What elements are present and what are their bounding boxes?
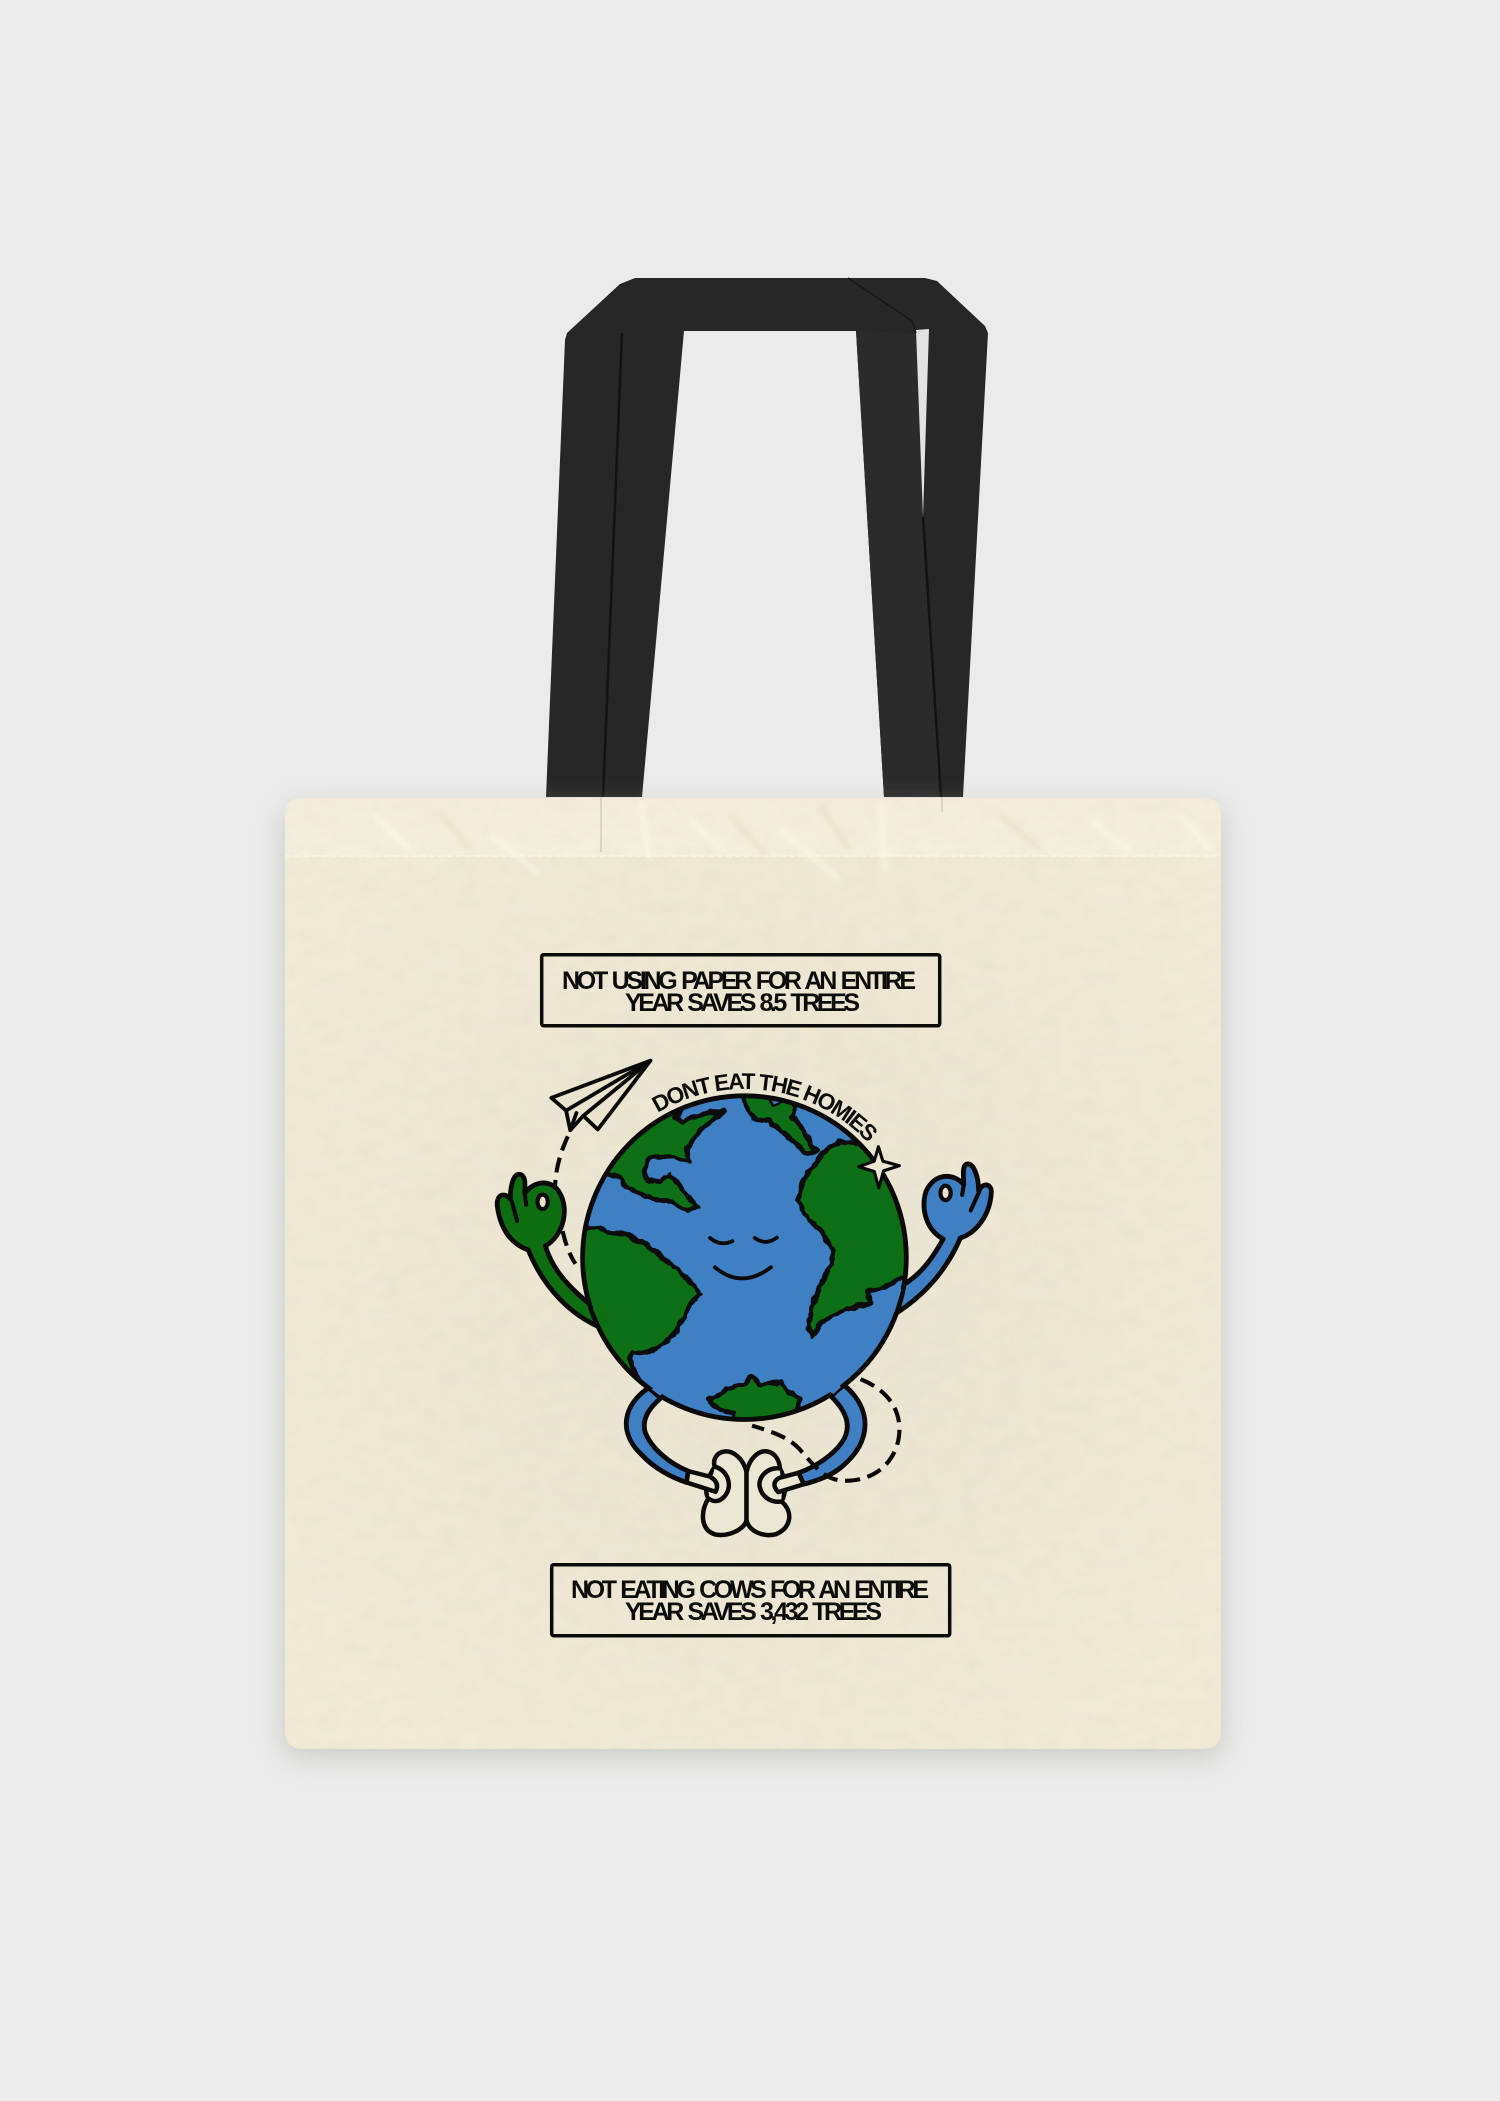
icon: star (859, 1147, 899, 1188)
legs (626, 1384, 865, 1492)
face (710, 1238, 777, 1278)
bottom label box (552, 1565, 950, 1636)
tote bag (285, 278, 1221, 1756)
dashed flight path: lower right (752, 1379, 899, 1481)
bottom label text: NOT EATING COWS FOR AN ENTIRE (571, 1576, 929, 1604)
top label text: YEAR SAVES 8.5 TREES (625, 989, 860, 1017)
globe (580, 1093, 909, 1422)
continents (585, 1098, 904, 1418)
right arm and hand (893, 1164, 991, 1315)
limb joins (593, 1286, 901, 1396)
dashed flight path: upper left (555, 1136, 575, 1264)
feet (703, 1451, 789, 1535)
bottom label text: YEAR SAVES 3,432 TREES (625, 1598, 882, 1626)
handle straps (546, 278, 988, 797)
curved slogan: DONT EAT THE HOMIES (651, 1073, 877, 1140)
top label box (542, 955, 940, 1026)
bottom label text (571, 1576, 929, 1626)
earth character illustration (494, 1058, 994, 1538)
left arm and hand (497, 1174, 601, 1328)
top label text (562, 967, 916, 1017)
icon: paper plane (551, 1061, 650, 1130)
top label text: NOT USING PAPER FOR AN ENTIRE (562, 967, 916, 995)
bag body (285, 797, 1221, 1756)
heel crescents (708, 1467, 729, 1501)
